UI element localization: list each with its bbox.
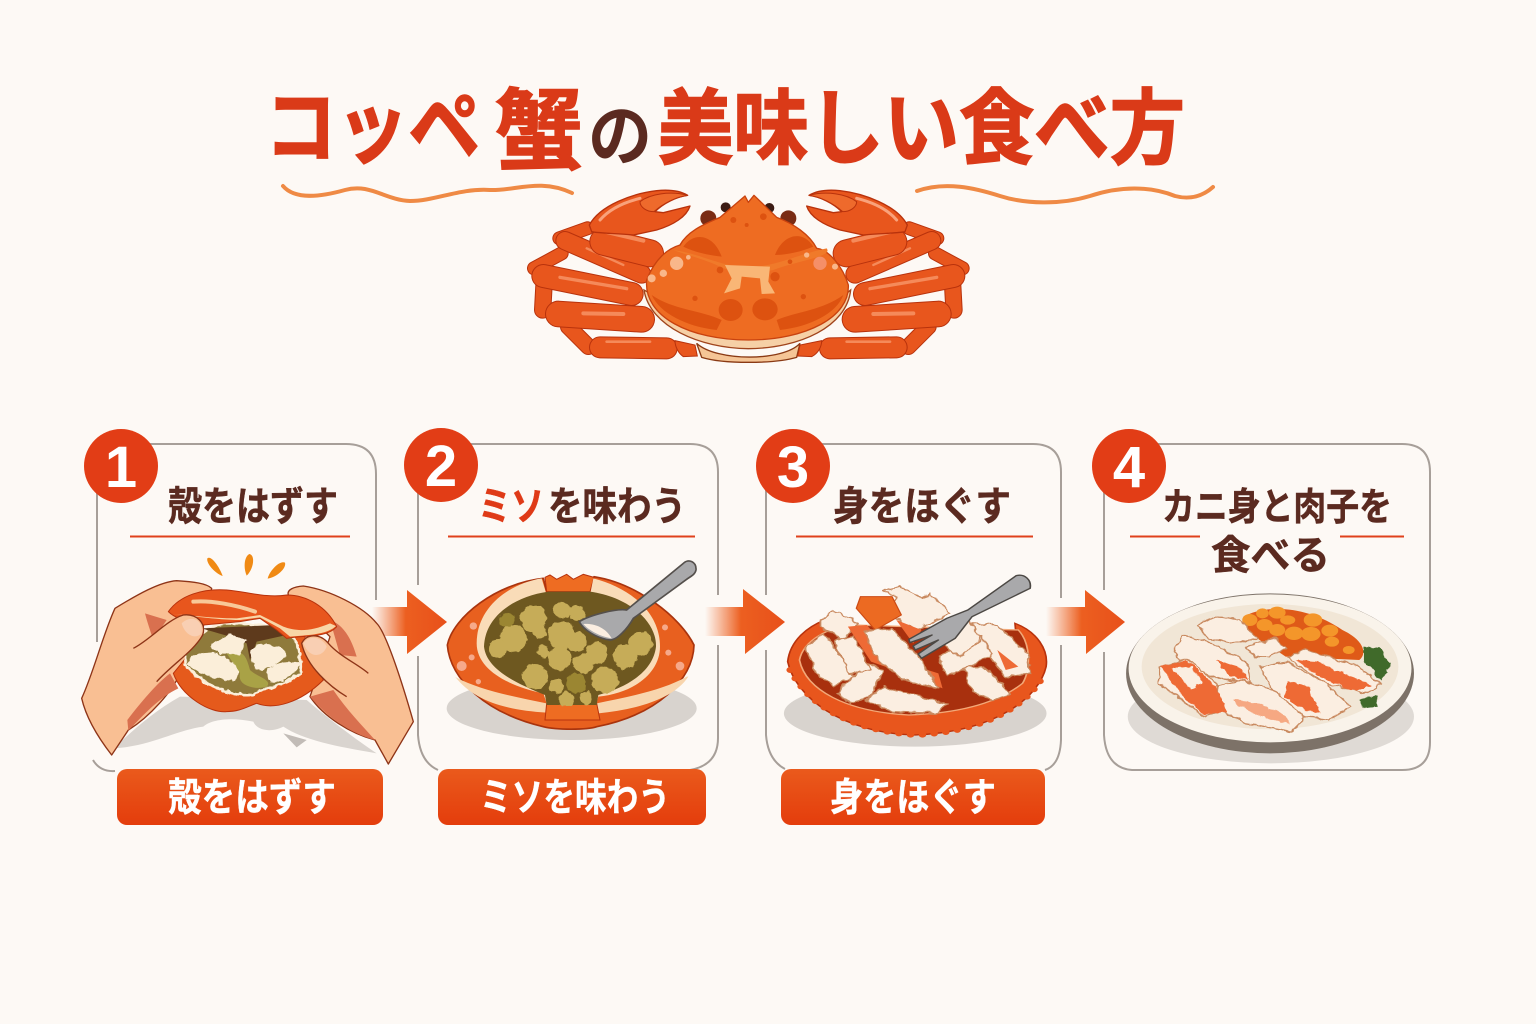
panel: step 1 frame bbox=[93, 444, 376, 771]
button: step 1: 殻をはずす bbox=[168, 777, 336, 820]
sparks bbox=[207, 554, 285, 579]
button: step 2: ミソを味わう bbox=[480, 777, 670, 820]
title wave right bbox=[917, 186, 1213, 202]
title: コッペ bbox=[265, 83, 480, 174]
button: step 3 bbox=[781, 769, 1045, 825]
heading: step 2 bbox=[478, 485, 686, 529]
heading: step 4 bbox=[1162, 487, 1392, 578]
underline: step 3 bbox=[796, 536, 1033, 538]
heading: step 4: カニ身と肉子を bbox=[1162, 487, 1392, 529]
illustration: crab meat with fork bbox=[784, 575, 1047, 747]
panel: step 2 frame bbox=[418, 444, 718, 770]
badge: number 1: 1 bbox=[105, 435, 137, 500]
fork bbox=[909, 575, 1030, 658]
arrow: step 1 to 2 bbox=[372, 590, 447, 654]
icon: crab bbox=[534, 190, 963, 362]
illustration: plate with crab meat and roe bbox=[1126, 593, 1414, 763]
illustration: hands opening crab shell bbox=[82, 554, 413, 764]
title wave left bbox=[283, 186, 572, 201]
title: 蟹 bbox=[495, 82, 583, 181]
heading: step 4: 食べる bbox=[1211, 534, 1330, 578]
button: step 2 bbox=[438, 769, 706, 825]
heading: step 1: 殻をはずす bbox=[168, 485, 338, 529]
arrow: step 3 to 4 bbox=[1046, 590, 1125, 654]
badge: number 1 bbox=[84, 429, 158, 503]
title: 美味しい食べ方 bbox=[658, 84, 1185, 175]
thumbs bbox=[133, 615, 204, 682]
heading: step 2: ミソ bbox=[478, 485, 544, 529]
panel: step 4 frame bbox=[1104, 444, 1430, 770]
heading: step 2: を味わう bbox=[548, 485, 686, 529]
badge: number 3: 3 bbox=[777, 435, 809, 500]
heading: step 3: 身をほぐす bbox=[833, 485, 1011, 529]
underline: step 2 bbox=[448, 536, 695, 538]
illustration: miso in shell with spoon bbox=[447, 561, 697, 740]
button: step 1 bbox=[117, 769, 383, 825]
arrow: step 2 to 3 bbox=[705, 589, 785, 654]
badge: number 3 bbox=[756, 429, 830, 503]
button: step 3: 身をほぐす bbox=[830, 777, 996, 820]
badge: number 4: 4 bbox=[1113, 435, 1145, 500]
title bbox=[265, 82, 1185, 181]
title: の bbox=[588, 99, 652, 175]
badge: number 2: 2 bbox=[425, 434, 457, 499]
underline: step 4 bbox=[1130, 536, 1404, 538]
underline: step 1 bbox=[130, 536, 350, 538]
spoon bbox=[579, 561, 696, 640]
badge: number 4 bbox=[1092, 429, 1166, 503]
badge: number 2 bbox=[404, 428, 478, 502]
panel: step 3 frame bbox=[766, 444, 1061, 770]
